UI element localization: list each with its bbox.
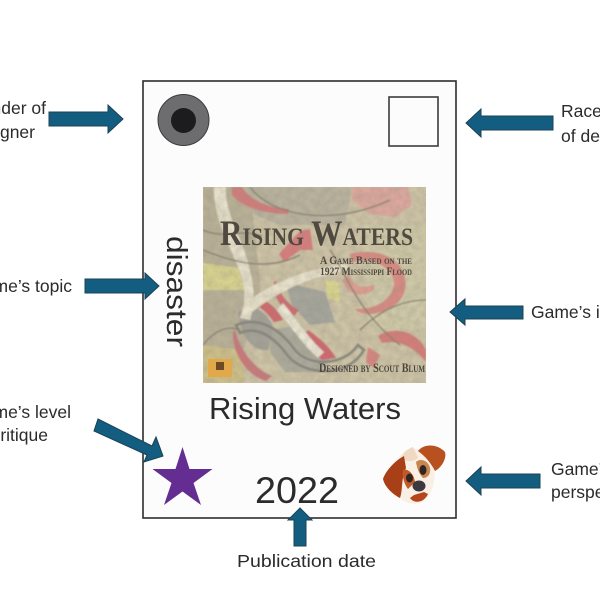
arrow: race of designer bbox=[466, 109, 553, 137]
arrow: level of critique bbox=[94, 419, 163, 462]
icon: dog perspective bbox=[383, 445, 445, 504]
game title: Rising Waters bbox=[209, 391, 401, 426]
game topic: disaster: disaster bbox=[160, 236, 192, 347]
card frame bbox=[143, 81, 456, 518]
icon: purple star bbox=[152, 447, 212, 505]
publisher logo bbox=[208, 359, 232, 377]
label: publication date: Publication date bbox=[237, 551, 376, 571]
arrow: gender of designer bbox=[49, 105, 123, 133]
arrow: game's topic bbox=[85, 273, 159, 299]
arrow: game's perspective bbox=[466, 467, 540, 495]
icon: race of designer square bbox=[389, 97, 438, 146]
game cover image: 1927 Mississippi Flood bbox=[320, 266, 412, 278]
arrow: game's image bbox=[450, 299, 523, 325]
game cover image bbox=[203, 187, 426, 383]
icon: gender of designer circle bbox=[158, 94, 209, 146]
game cover image: Designed by Scout Blum bbox=[319, 360, 425, 375]
dog head bbox=[393, 448, 435, 504]
map title: Rising Waters bbox=[220, 213, 413, 253]
arrow: publication date bbox=[288, 508, 312, 546]
game cover image: A Game Based on the bbox=[320, 255, 412, 267]
map artwork bbox=[203, 187, 426, 383]
publication year: 2022 bbox=[255, 470, 339, 511]
